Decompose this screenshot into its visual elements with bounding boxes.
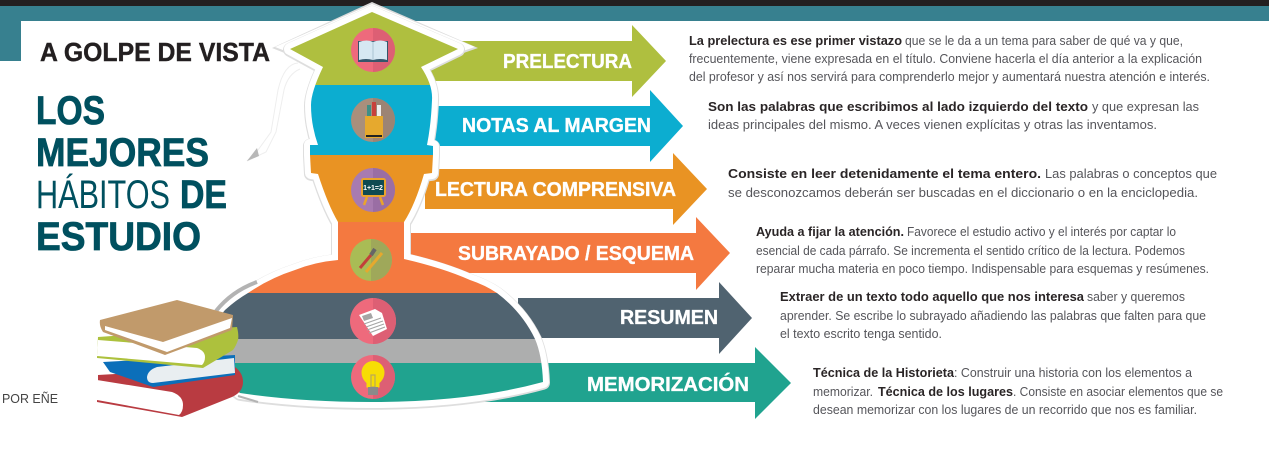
text block: resumen xyxy=(780,289,1206,341)
arrow: subrayado / esquema: SUBRAYADO / ESQUEMA xyxy=(458,243,694,265)
text block: lectura comprensiva: se desconozcamos deberán ser buscadas en el diccionario o en la enciclopedia. xyxy=(728,185,1198,200)
icon: light bulb xyxy=(351,355,395,399)
text block: memorización: Técnica de los lugares xyxy=(878,384,1013,399)
arrow: resumen xyxy=(518,282,752,354)
crescent shadow left xyxy=(216,282,257,311)
blue book xyxy=(103,355,235,387)
text block: memorización: : Construir una historia con los elementos a xyxy=(954,365,1193,380)
icon: pencil cup xyxy=(351,98,395,142)
text block: prelectura: que se le da a un tema para saber de qué va y que, xyxy=(905,33,1183,48)
text block: lectura comprensiva xyxy=(728,166,1217,200)
icon: blackboard xyxy=(351,168,395,212)
icon: document xyxy=(350,298,396,344)
text block: resumen: aprender. Se escribe lo subrayado añadiendo las palabras que falten para que xyxy=(780,308,1206,323)
arrow: prelectura: PRELECTURA xyxy=(503,51,632,73)
icon: blackboard: 1+1=2 xyxy=(363,185,383,192)
band: green cap xyxy=(290,12,458,85)
text block: notas al margen: Son las palabras que escribimos al lado izquierdo del texto xyxy=(708,99,1088,114)
text block: memorización: . Consiste en asociar elementos que se xyxy=(1013,384,1223,399)
text block: subrayado xyxy=(756,224,1209,276)
icon: pencils xyxy=(350,239,392,281)
arrow: prelectura xyxy=(420,25,666,97)
arrow: resumen: RESUMEN xyxy=(620,307,718,329)
arrow: subrayado / esquema xyxy=(410,217,730,290)
byline: POR EÑE xyxy=(2,391,58,406)
text block: subrayado: esencial de cada párrafo. Se incrementa el sentido crítico de la lectura. Podemos xyxy=(756,243,1185,258)
band: coral xyxy=(248,222,497,293)
icon: open book xyxy=(351,28,395,72)
text block: resumen: el texto escrito tenga sentido. xyxy=(780,326,942,341)
arrow: notas al margen: NOTAS AL MARGEN xyxy=(462,115,651,137)
tan book xyxy=(100,300,233,355)
text block: subrayado: reparar mucha materia en poco tiempo. Indispensable para esquemas y resúmenes. xyxy=(756,261,1209,276)
arrow: memorización: MEMORIZACIÓN xyxy=(587,372,749,396)
text block: resumen: saber y queremos xyxy=(1087,289,1185,304)
text block: lectura comprensiva: Consiste en leer detenidamente el tema entero. xyxy=(728,166,1041,181)
text block: prelectura: frecuentemente, viene expresada en el título. Conviene hacerla el día anterior a la explicación xyxy=(689,51,1202,66)
band: orange xyxy=(310,155,433,222)
text block: prelectura xyxy=(689,33,1210,84)
text block: lectura comprensiva: Las palabras o conceptos que xyxy=(1045,166,1217,181)
text block: prelectura: La prelectura es ese primer vistazo xyxy=(689,33,902,48)
text block: prelectura: del profesor y así nos servirá para comprenderlo mejor y aumentará nuestra atención e interés. xyxy=(689,69,1210,84)
title: HÁBITOS xyxy=(36,172,170,217)
band: blue xyxy=(310,85,433,155)
title xyxy=(36,89,227,259)
text block: resumen: Extraer de un texto todo aquello que nos interesa xyxy=(780,289,1085,304)
text block: memorización: memorizar. xyxy=(813,384,873,399)
top header band xyxy=(0,0,1269,61)
icon: stack of books xyxy=(97,300,243,417)
red book xyxy=(97,367,243,417)
arrow: memorización xyxy=(480,347,791,419)
text block: memorización: Técnica de la Historieta xyxy=(813,365,955,380)
tassel outline xyxy=(247,63,300,161)
title: LOS xyxy=(36,89,105,133)
head silhouette with graduation cap xyxy=(214,2,550,410)
band: slate xyxy=(223,293,535,339)
band: teal xyxy=(235,363,543,402)
arrow: lectura comprensiva xyxy=(425,153,707,225)
text block: subrayado: Ayuda a fijar la atención. xyxy=(756,224,904,239)
arrow: notas al margen xyxy=(420,90,683,162)
title: MEJORES xyxy=(36,131,209,175)
text block: notas al margen: ideas principales del mismo. A veces vienen explícitas y otras las inventamos. xyxy=(708,117,1157,132)
title: ESTUDIO xyxy=(36,215,201,259)
title: DE xyxy=(180,173,227,217)
green book xyxy=(97,327,238,368)
arrow: lectura comprensiva: LECTURA COMPRENSIVA xyxy=(435,179,676,201)
text block: memorización: desean memorizar con los lugares de un recorrido que nos es familiar. xyxy=(813,402,1197,417)
text block: notas al margen xyxy=(708,99,1199,132)
band: gray xyxy=(224,339,542,363)
text block: subrayado: Favorece el estudio activo y el interés por captar lo xyxy=(907,224,1176,239)
text block: memorización xyxy=(813,365,1223,417)
text block: notas al margen: y que expresan las xyxy=(1092,99,1199,114)
section heading: A GOLPE DE VISTA xyxy=(40,37,270,67)
